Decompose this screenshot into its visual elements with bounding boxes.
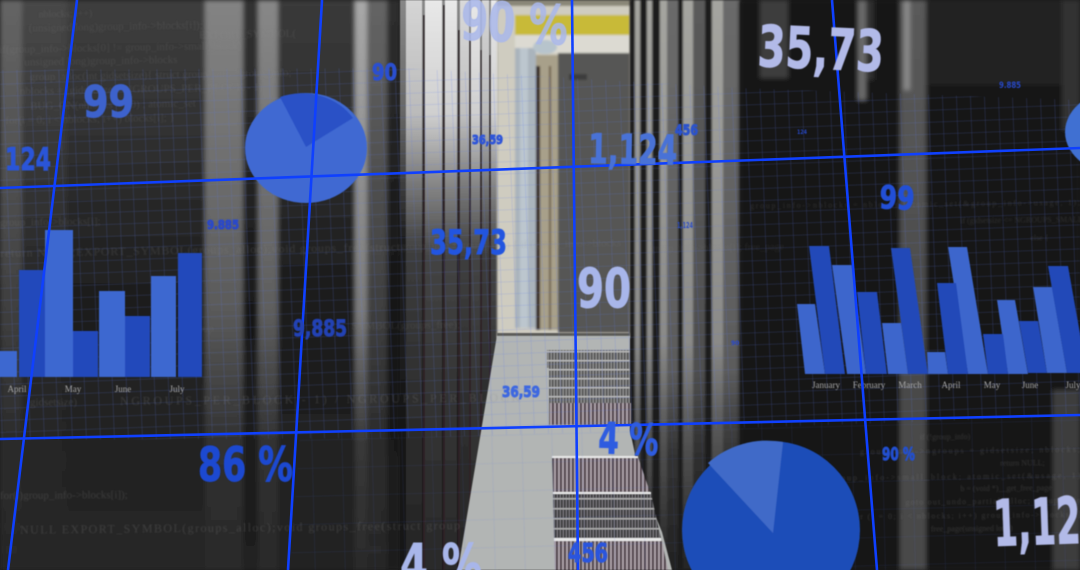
month labels: left chart: June [115,384,131,394]
code block: lower right: if (!group_info) [920,432,971,442]
code block: lower left: NULL EXPORT_SYMBOL(groups_alloc);void groups_free(struct group [20,518,460,537]
bar group: dark bars [809,246,1080,374]
month labels: right chart: February [853,380,886,390]
code block: mid left: group_info->blocks[i]; [0,215,101,229]
percent: 4 % centre: 4 % [598,414,659,466]
number: 1,124 centre: 1,124 [588,125,678,175]
code block: lower right: free_page(unsigned long) [931,524,1013,534]
number: 1,124 tiny: 1,124 [677,221,693,230]
code block: lower right: group_info->small_block; atomic_set(&usage, 1) [830,471,1080,483]
month labels: right chart: May [984,380,1001,390]
pie chart: lower centre [682,441,860,570]
number: 36,59 floor: 36,59 [502,383,540,401]
code block: lower right: goto out_undo_partial_alloc; group_info [905,496,1080,507]
number: 9.885 tiny right: 9.885 [999,81,1021,91]
code block: top left: group_alloc(int gidsetsize){ struct group_info *group_info; [30,67,292,83]
code block: top left: BUG_ON(nblocks == 0) ; atomic_set [30,98,196,112]
code block: mid left: group_info *group_info) { if (group_info->blocks [400,237,621,253]
month labels: right chart [812,380,1080,390]
left server racks [0,0,401,570]
code block: lower right: return NULL; [1000,458,1045,468]
code block: lower left [0,390,520,537]
month labels: right chart: April [942,380,961,390]
number: 90 top: 90 [372,61,397,86]
month labels: right chart: June [1022,380,1038,390]
code block: lower right: b = (void *)__get_free_page [960,483,1052,493]
number: 90 centre: 90 [577,257,631,320]
code block: top left [0,5,298,127]
code block: top left: nblocks = (gidsetsize + NGROUPS_PER_BLOCK - 1) [20,81,263,98]
code block: top left: for(i = 0; i < nblocks; i++) blocks[i]; } [5,112,175,127]
code block: mid left: group_info->blocks[i]; free_page [650,242,785,255]
far right racks [740,0,1080,570]
small dot marker: 90 [731,340,739,347]
code block: lower left: for(i)group_info->blocks[i]); [0,489,128,502]
number: 99 right: 99 [879,178,916,218]
number: 456 small: 456 [675,123,698,139]
code block: upper right [750,198,1080,245]
rack seams [423,5,491,570]
number: 124: 124 [5,142,51,178]
month labels: left chart: May [65,384,82,394]
month labels: right chart: January [812,380,840,390]
number: 124 tiny right: 124 [797,129,807,136]
pie slice: light segment [708,441,783,533]
code block: upper right: else { [1030,233,1049,243]
code block: mid left: return NULL;EXPORT_SYMBOL(groups_alloc);void groups_free(struct [0,240,401,260]
code block: top left: if(group_info->blocks[0] != group_info->small_block) [0,40,242,56]
code block: mid left: SYMBOL(groups_free); [351,319,460,332]
number: 9,885 lower left: 9,885 [293,317,347,342]
bar chart: right [797,246,1080,390]
number: 36,59 small: 36,59 [472,133,503,147]
code block: lower right: for (i = 0; i < nblocks; i++) group_info->blocks[i] [851,510,1080,521]
month labels: left chart [8,384,185,394]
number: 35,73 centre: 35,73 [430,223,507,263]
percent: 86 %: 86 % [198,438,293,493]
pie chart: upper left [245,93,367,203]
bar group: light bars [0,230,176,377]
corridor end wall [497,0,631,338]
month labels: right chart: March [898,380,922,390]
code block: top left: unsigned long)group_info->blocks [24,54,178,69]
mid-left rack fronts [400,0,506,570]
code block: lower left: NGROUPS_PER_BLOCK - 1) / NGROUPS_PER_BLOCK [120,390,520,408]
number: 9.885 left: 9.885 [207,218,239,232]
bar group: light bars [797,247,1067,374]
floor and grates [458,333,672,570]
code block: lower right [830,431,1080,535]
code block: top left: (unsigned long)group_info->blocks[i]); [29,19,203,34]
code block: lower left: gidsetsize) [30,396,77,409]
month labels: left chart: July [169,384,185,394]
number: 456 bottom: 456 [568,539,608,569]
pie chart: right edge, cropped [1065,88,1080,176]
bar group: dark bars [19,253,202,377]
month labels: left chart: April [8,384,27,394]
code block: mid left [0,205,786,338]
code block: lower right: group_info->ngroups = gidsetsize; nblocks; [860,445,1080,456]
code block: top left: EXPORT_SYMBOL( [199,28,296,42]
bar chart: left [0,230,202,394]
percent: 90 % right: 90 % [882,444,915,465]
code block: mid left: i < nblocks; i++) group [111,323,214,336]
number: 35,73 top right: 35,73 [756,14,885,85]
right server racks [630,0,740,570]
code block: top left: nblocks; i++) [38,8,92,20]
number: 99 top left: 99 [83,77,134,128]
code block: upper right: group_info->nblocks = nblocks; atomic_set(&group_info->usage, 1); [750,198,1080,210]
pie slice: dark segment [280,93,353,147]
